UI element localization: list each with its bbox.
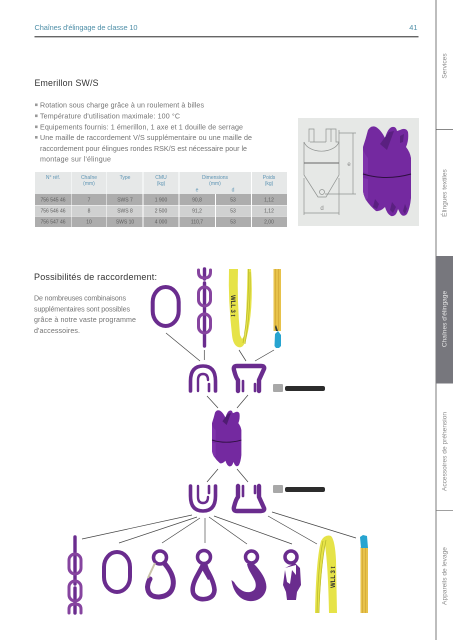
technical drawing: e xyxy=(347,162,351,168)
title: Emerillon SW/S xyxy=(34,78,99,88)
specifications table: e xyxy=(196,188,199,194)
self-locking hook xyxy=(193,550,214,599)
specifications table: 10 xyxy=(86,220,92,226)
intro paragraph xyxy=(34,294,136,335)
specifications table: (mm) xyxy=(209,181,221,187)
clevis hook xyxy=(232,551,266,601)
swivel photo xyxy=(363,126,411,216)
intro paragraph: d'accessoires. xyxy=(34,327,80,335)
top connector right xyxy=(234,366,264,391)
specifications table: 110,7 xyxy=(191,220,203,226)
feature list: Rotation sous charge grâce à un roulement à billes xyxy=(40,102,204,110)
specifications table: SWS 8 xyxy=(117,208,133,214)
bottom connector left xyxy=(190,486,216,511)
feature list: Une maille de raccordement V/S supplémentaire ou une maille de xyxy=(40,134,252,142)
specifications table: 91,2 xyxy=(192,208,202,214)
specifications table: 90,8 xyxy=(192,198,202,204)
feature list xyxy=(35,102,252,164)
feature list: montage sur l'élingue xyxy=(40,156,111,164)
eye hook with latch xyxy=(148,551,173,597)
specifications table: 1,12 xyxy=(264,198,274,204)
side navigation xyxy=(435,0,453,640)
specifications table: 4 000 xyxy=(155,220,167,226)
technical drawing xyxy=(304,129,356,215)
specifications table: (kg) xyxy=(157,181,166,187)
feature list: Température d'utilisation maximale: 100 °C xyxy=(40,112,180,120)
bottom pin xyxy=(273,485,325,493)
specifications table: Type xyxy=(120,175,131,181)
specifications table: 53 xyxy=(230,220,236,226)
connector lines xyxy=(82,333,356,544)
shortening hook xyxy=(283,551,301,600)
bottom round sling: WLL 3 t xyxy=(331,566,337,588)
specifications table: 1,12 xyxy=(264,208,274,214)
top round sling xyxy=(229,269,252,347)
intro paragraph: De nombreuses combinaisons xyxy=(34,294,126,302)
intro paragraph: grâce à notre vaste programme xyxy=(34,316,136,324)
specifications table: (mm) xyxy=(83,181,95,187)
top sling with blue tip xyxy=(274,269,281,348)
specifications table: N° réf. xyxy=(46,175,60,181)
bottom master link xyxy=(104,552,130,592)
specifications table: 53 xyxy=(230,198,236,204)
page header: 41 xyxy=(409,23,418,32)
feature list: Equipements fournis: 1 émerillon, 1 axe et 1 douille de serrage xyxy=(40,124,243,132)
intro paragraph: supplémentaires sont possibles xyxy=(34,306,130,314)
technical drawing: d xyxy=(320,206,324,212)
specifications table: 7 xyxy=(88,198,91,204)
feature list: raccordement pour élingues rondes RSK/S est nécessaire pour le xyxy=(40,145,247,153)
top round sling: WLL 3 t xyxy=(229,295,235,317)
side navigation: Accessoires de préhension xyxy=(442,412,448,491)
top chain xyxy=(198,269,210,346)
specifications table: SWS 7 xyxy=(117,198,133,204)
page header: Chaînes d'élingage de classe 10 xyxy=(34,23,138,32)
side navigation: Élingues textiles xyxy=(440,168,448,217)
bottom chain xyxy=(69,537,81,613)
specifications table: 756 547 46 xyxy=(40,220,66,226)
central swivel xyxy=(212,410,241,466)
specifications table xyxy=(35,172,287,227)
specifications table: (kg) xyxy=(265,181,274,187)
bottom round sling xyxy=(315,536,337,613)
product photo panel xyxy=(298,118,419,226)
side navigation: Services xyxy=(442,53,448,79)
specifications table: Chaîne xyxy=(81,175,97,181)
specifications table: CMU xyxy=(155,175,167,181)
top master link xyxy=(153,287,179,326)
bottom sling with blue tip xyxy=(360,535,368,613)
specifications table: Poids xyxy=(263,175,276,181)
specifications table: 53 xyxy=(230,208,236,214)
section heading: Possibilités de raccordement: xyxy=(34,272,157,282)
top pin xyxy=(273,384,325,392)
specifications table: 756 545 46 xyxy=(40,198,66,204)
side navigation: Chaînes d'élingage xyxy=(442,291,448,347)
specifications table: d xyxy=(232,188,235,194)
specifications table: 2 500 xyxy=(155,208,167,214)
top connector left xyxy=(190,366,216,391)
side navigation: Appareils de levage xyxy=(442,547,448,605)
specifications table: 756 546 46 xyxy=(40,208,66,214)
specifications table: 8 xyxy=(88,208,91,214)
page header xyxy=(34,23,418,37)
specifications table: 2,00 xyxy=(264,220,274,226)
specifications table: 1 900 xyxy=(155,198,167,204)
bottom connector right xyxy=(234,486,264,511)
specifications table: SWS 10 xyxy=(116,220,134,226)
specifications table: Dimensions xyxy=(202,175,229,181)
